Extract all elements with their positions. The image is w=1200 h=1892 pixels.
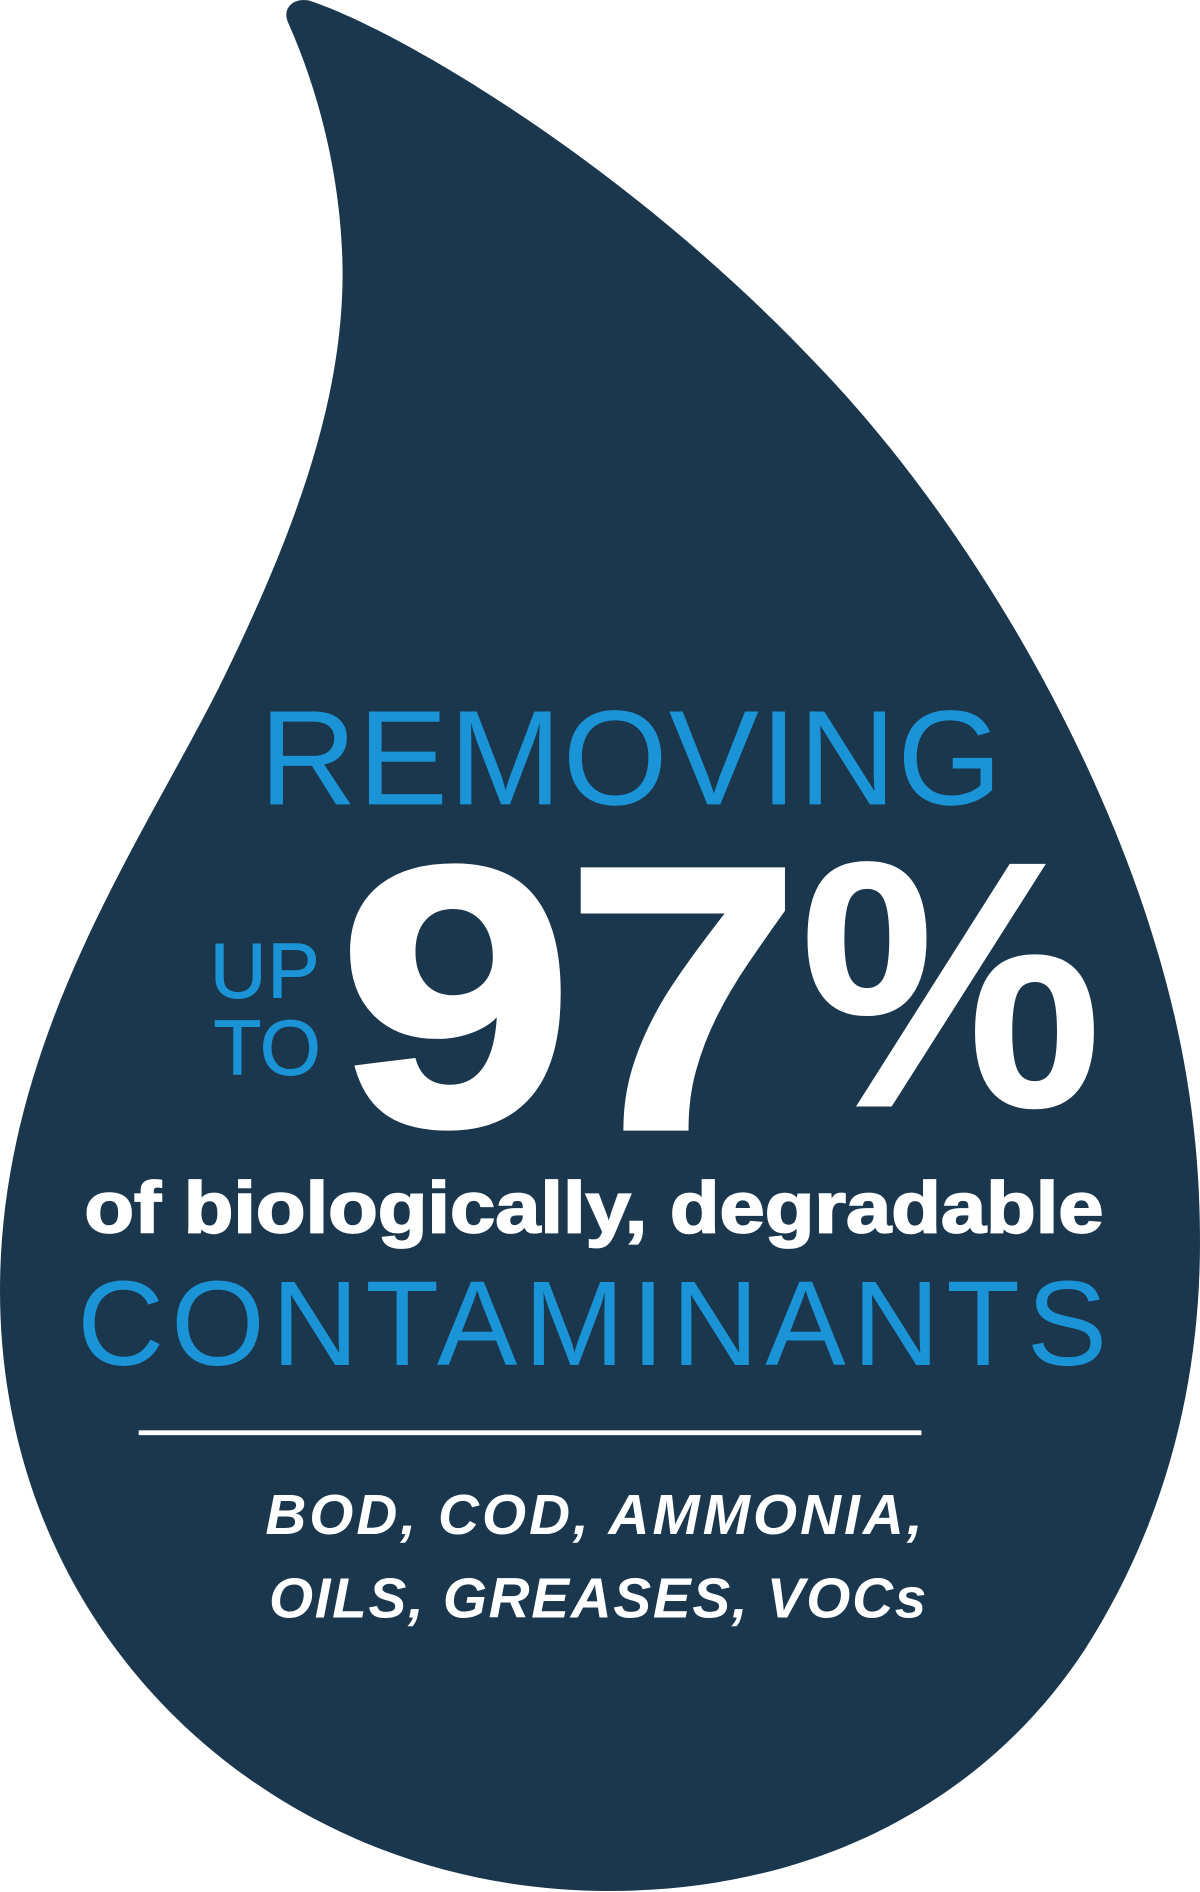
label: up to: TO: [213, 1004, 321, 1092]
heading: contaminants: CONTAMINANTS: [77, 1256, 1107, 1391]
divider line: [139, 1430, 921, 1435]
big number: 97%: [339, 788, 1102, 1209]
label: up to: [210, 926, 321, 1092]
contaminant list: BOD, COD, AMMONIA,: [265, 1484, 923, 1547]
text: of biologically, degradable: of biologically, degradable: [84, 1168, 1104, 1249]
big number: 97%: %: [800, 789, 1102, 1181]
heading: removing: REMOVING: [259, 682, 1002, 833]
contaminant list: [265, 1484, 926, 1630]
contaminant list: OILS, GREASES, VOCs: [269, 1567, 926, 1630]
big number: 97%: 7: [564, 788, 802, 1209]
label: up to: UP: [210, 926, 320, 1014]
big number: 97%: 9: [339, 790, 573, 1202]
